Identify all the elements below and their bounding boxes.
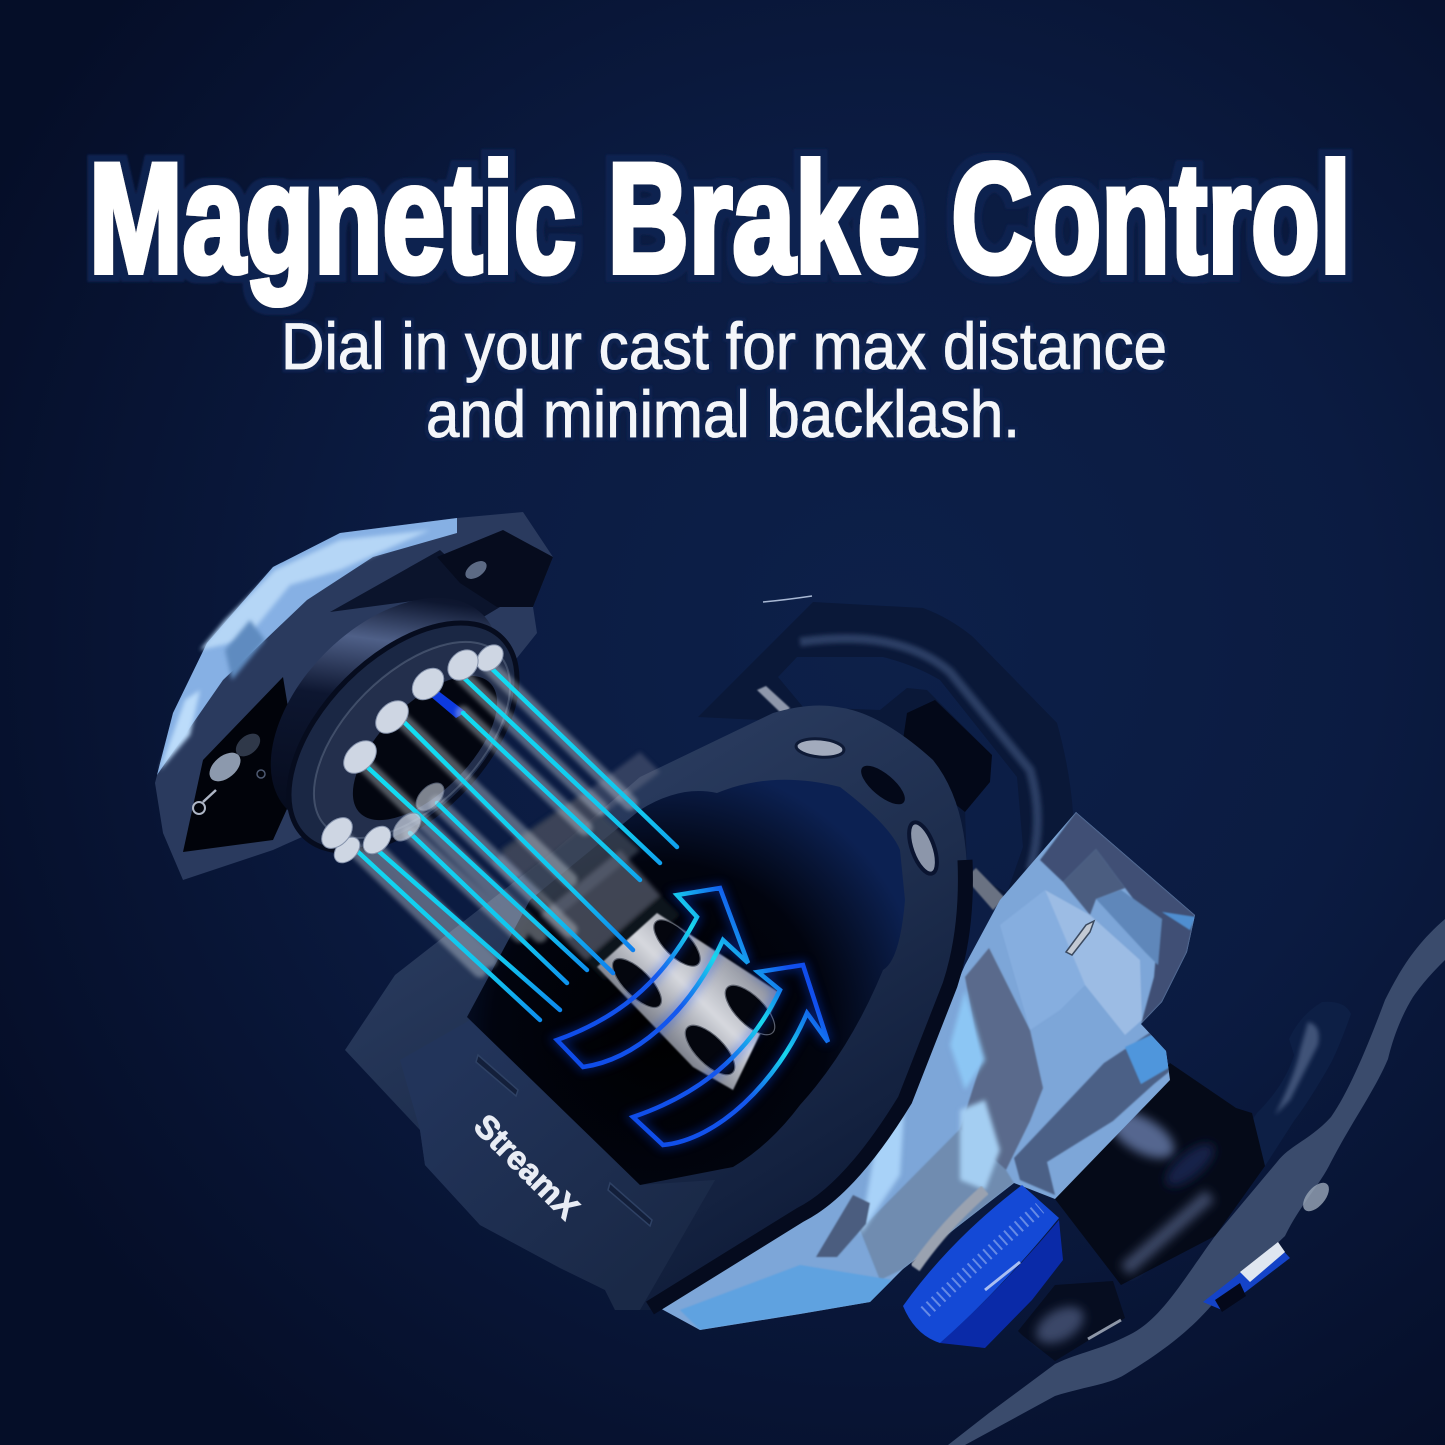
- magnets: [316, 640, 508, 868]
- shaft bands: [492, 752, 680, 980]
- camouflage rim: [157, 518, 457, 775]
- brake shaft and spool: [492, 752, 783, 1090]
- spool holes: [605, 913, 783, 1083]
- side cylinder: [1055, 1063, 1265, 1285]
- subtitle: [281, 309, 1167, 451]
- ring face: [247, 581, 559, 893]
- camouflage side plate: [645, 812, 1195, 1330]
- drag arm: [1018, 1281, 1125, 1361]
- main body: [345, 705, 967, 1310]
- brand logo: StreamX: [467, 1107, 587, 1226]
- side blue bracket: [1203, 1178, 1334, 1312]
- housing dark band: [330, 550, 500, 625]
- beam lines: [343, 665, 677, 1020]
- back frame: [698, 596, 1085, 900]
- fishing reel illustration: [155, 512, 1445, 1445]
- magnetic field beams: [343, 665, 677, 1020]
- subtitle: and minimal backlash.: [426, 377, 1020, 451]
- spool body: [597, 913, 780, 1090]
- magnet housing: [155, 512, 559, 893]
- axle rod: [965, 868, 1005, 910]
- spool cavity: [467, 780, 905, 1185]
- beam halos: [343, 665, 630, 970]
- dial details: [193, 557, 490, 814]
- housing top corner: [437, 530, 553, 607]
- rotation arrow lower: [633, 965, 828, 1145]
- frame slots: [795, 737, 943, 877]
- rotation arrow upper: [557, 888, 748, 1067]
- handle lever: [948, 919, 1445, 1445]
- subtitle: Dial in your cast for max distance: [281, 309, 1167, 383]
- plate rivet: [1066, 921, 1094, 955]
- housing black panel: [183, 677, 300, 852]
- body dark edge: [650, 860, 965, 1308]
- StreamX plate: [400, 1020, 715, 1310]
- ring cylinder: [228, 555, 542, 869]
- plate slots: [476, 1055, 652, 1226]
- ring hole: [329, 652, 521, 844]
- lever fin: [1210, 1002, 1351, 1180]
- brake knob: [903, 1185, 1063, 1348]
